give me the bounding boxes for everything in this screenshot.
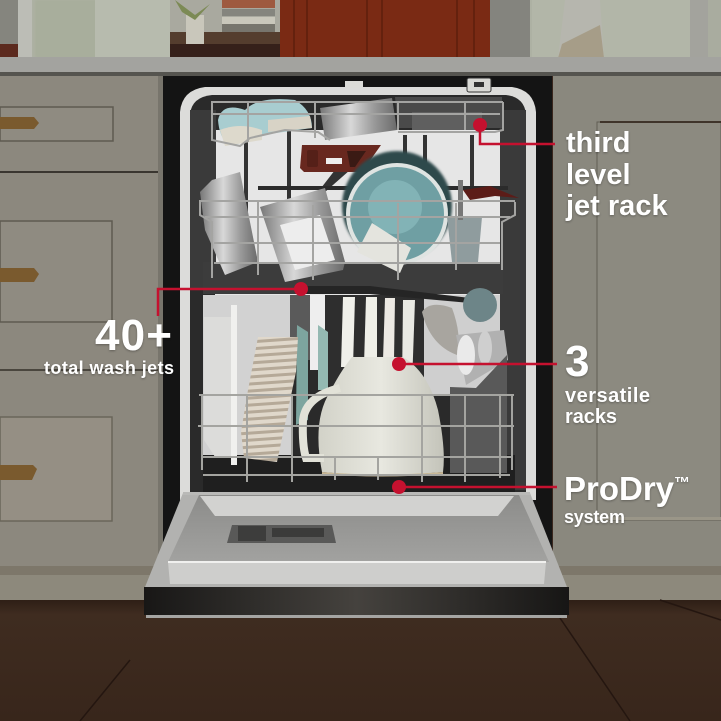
- detergent dispenser: [227, 525, 336, 543]
- big bowl: [318, 357, 444, 475]
- bowls: [218, 99, 312, 145]
- drawer handle: middle: [0, 268, 39, 282]
- label: 3 versatile racks: versatile: [565, 385, 650, 407]
- label: 3 versatile racks: [565, 337, 650, 428]
- dishwasher body: [163, 76, 552, 556]
- bowl base rim: [322, 473, 443, 476]
- glass: [320, 98, 397, 140]
- left glass containers: [200, 172, 345, 282]
- drawer handle: top: [0, 117, 39, 129]
- spray arm: [300, 286, 470, 303]
- countertop: [0, 57, 721, 76]
- label: third level jet rack: third: [566, 127, 630, 159]
- callout line: 3 racks: [392, 357, 557, 371]
- label: ProDry system: [564, 470, 690, 527]
- callout line: third level jet rack: [473, 118, 555, 144]
- right wine glass: [447, 180, 519, 262]
- black door panel: [144, 587, 569, 615]
- top rack items: [218, 97, 502, 146]
- right cabinet: [553, 76, 721, 568]
- label: ProDry system: ProDry: [564, 470, 674, 507]
- open door: [144, 492, 569, 618]
- label: 40+ total wash jets: total wash jets: [44, 358, 174, 378]
- teal bowl behind: [463, 288, 497, 322]
- middle rack rail: [258, 186, 508, 190]
- whisk: [422, 305, 459, 355]
- label: ProDry system: system: [564, 507, 625, 527]
- teal lids: [296, 325, 308, 425]
- label: 40+ total wash jets: 40+: [95, 311, 172, 360]
- red-brown rack clip: [300, 145, 381, 172]
- tray: [395, 97, 502, 128]
- label: ProDry system: ™: [674, 475, 690, 492]
- silverware: [456, 330, 508, 385]
- top rack wires: [211, 102, 503, 146]
- vase: [558, 0, 604, 58]
- baking pan: [204, 317, 234, 457]
- middle rack wires: [199, 200, 515, 280]
- background kitchen wall: [0, 0, 721, 60]
- callout line: 40+ wash jets: [158, 282, 308, 316]
- red cabinet: [280, 0, 490, 58]
- wooden shelf with books and plant: [170, 0, 280, 58]
- drawer handle: bottom: [0, 465, 37, 480]
- label: 3 versatile racks: racks: [565, 406, 617, 428]
- callout line: ProDry: [392, 480, 557, 494]
- label: 3 versatile racks: 3: [565, 337, 589, 386]
- teal plate: [342, 151, 452, 265]
- left cabinets: [0, 76, 163, 568]
- tub back wall: [190, 110, 526, 490]
- label: third level jet rack: level: [566, 159, 630, 191]
- striped ring: [241, 337, 298, 462]
- silverware basket: [450, 355, 507, 473]
- label: third level jet rack: jet rack: [565, 190, 668, 222]
- label: 40+ total wash jets: [44, 311, 174, 378]
- lower rack wires: [198, 395, 514, 482]
- tub floor: [203, 455, 515, 492]
- lower rack dishes: [203, 288, 515, 492]
- toe kick and floor: [0, 566, 721, 721]
- striped cup: [357, 223, 411, 273]
- band under the middle rack: [203, 262, 503, 294]
- plates: [341, 297, 355, 367]
- bowl handle: [303, 388, 340, 458]
- label: third level jet rack: [565, 127, 668, 222]
